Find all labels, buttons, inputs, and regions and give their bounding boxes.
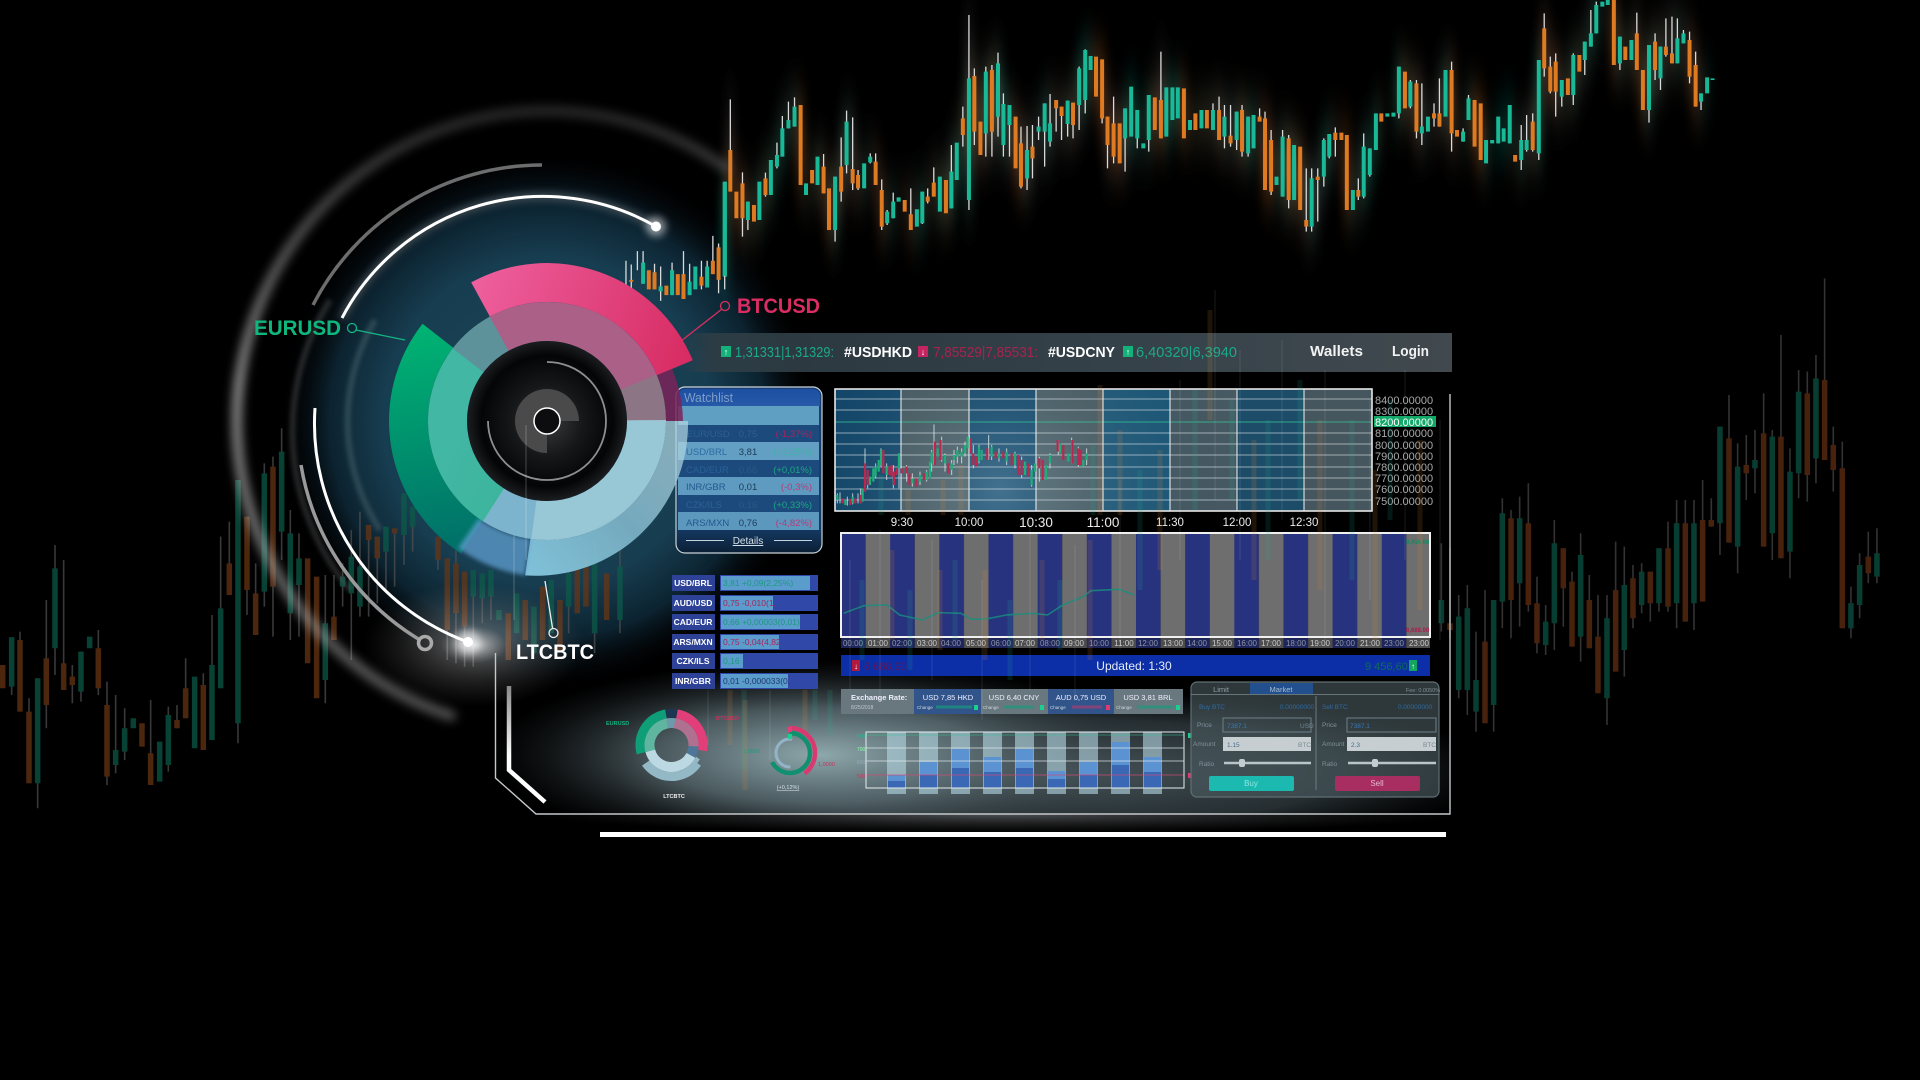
hour axis: 11:00	[1114, 639, 1134, 648]
bar chart markers: 700	[857, 747, 866, 753]
mini ring chart	[606, 701, 739, 800]
sell column: Ratio	[1322, 761, 1338, 768]
main ring chart	[389, 263, 693, 620]
hour axis: 15:00	[1212, 639, 1233, 648]
watchlist rows	[678, 406, 819, 530]
row ARS/MXN	[672, 634, 818, 650]
watchlist rows: CAD/EUR	[686, 465, 729, 476]
buy column: BTC	[1298, 742, 1311, 749]
center circle	[534, 408, 560, 434]
row CAD/EUR: CAD/EUR	[674, 617, 712, 627]
ticker: USDHKD: #USDHKD	[844, 344, 912, 361]
hour axis: 21:00	[1360, 639, 1381, 648]
row USD/BRL	[672, 575, 818, 591]
watchlist rows: 0,16	[739, 500, 757, 511]
translucent candles showing through the dashboard	[708, 290, 1440, 790]
glow below the frame	[608, 814, 1393, 830]
watchlist rows: INR/GBR	[686, 482, 726, 493]
white arc lower with end dot	[314, 408, 480, 654]
time axis: 11:30	[1156, 517, 1184, 529]
mini candles inside price chart	[835, 424, 1087, 506]
gauge markers and labels: 1,0000	[818, 762, 835, 768]
watchlist details link: Details	[733, 536, 763, 547]
watchlist title: Watchlist	[684, 391, 734, 405]
mini ring labels: LTCBTC	[663, 794, 685, 800]
sell button: Sell	[1370, 779, 1384, 788]
hour axis: 13:00	[1163, 639, 1184, 648]
price axis: 8100.00000	[1375, 428, 1433, 440]
hour axis: 18:00	[1286, 639, 1307, 648]
time axis: 11:00	[1087, 515, 1119, 530]
buy column: 1.15	[1227, 742, 1240, 749]
row AUD/USD: 0,75 -0,010(1,	[723, 598, 776, 608]
hour axis: 03:00	[917, 639, 938, 648]
ticker: USDCNY: 6,40320|6,3940	[1136, 344, 1237, 361]
hour axis: 01:00	[868, 639, 889, 648]
watchlist rows: (+0,33%)	[773, 500, 812, 511]
hour axis: 20:00	[1335, 639, 1356, 648]
watchlist rows: 0,01	[739, 482, 757, 493]
sell column: 0.00000000	[1398, 704, 1433, 711]
ticker: USDHKD: ↓	[921, 347, 925, 357]
exchange rate cells: USD 7,85 HKD	[923, 693, 974, 702]
ticker: USDCNY	[1048, 344, 1237, 361]
hour axis: 04:00	[941, 639, 962, 648]
low price with down arrow: 6 688,90	[864, 661, 907, 673]
watchlist rows: 0,76	[739, 518, 757, 529]
low price with down arrow: ↓	[854, 662, 858, 671]
corner elbow accent	[509, 686, 545, 802]
hour axis: 09:00	[1064, 639, 1085, 648]
sell column	[1322, 704, 1436, 768]
bright lens flare at arc end	[364, 583, 584, 707]
mini ring labels: BTCUSD	[716, 716, 739, 722]
time axis: 12:00	[1223, 517, 1251, 529]
exchange rate cells: AUD 0,75 USD	[1056, 693, 1107, 702]
background glow behind the ring	[282, 156, 812, 686]
price axis: 7900.00000	[1375, 451, 1433, 463]
ghost candle crossing the center	[514, 425, 526, 620]
label: LTCBTC	[516, 581, 594, 664]
row INR/GBR	[672, 673, 818, 689]
order tabs	[1213, 683, 1440, 694]
hour axis: 14:00	[1187, 639, 1208, 648]
row AUD/USD	[672, 595, 818, 611]
central grey pie	[515, 389, 579, 453]
row CZK/ILS	[672, 653, 818, 669]
order tabs: Limit	[1213, 685, 1230, 694]
watchlist rows: 3,81	[739, 447, 757, 458]
candlestick chart glow: blurred echo of the main chart	[725, 0, 1713, 277]
price axis: 8200.00000	[1375, 417, 1433, 429]
infographic canvas	[0, 0, 1880, 837]
hour axis: 17:00	[1261, 639, 1282, 648]
hour axis: 05:00	[966, 639, 987, 648]
hour axis: 19:00	[1310, 639, 1331, 648]
high price with up arrow: 9 456,60	[1365, 661, 1408, 673]
sell column: 7387.1	[1350, 723, 1370, 730]
exchange rate strip: Change	[1050, 705, 1066, 710]
grey arc upper	[313, 165, 542, 305]
exchange rate title: Exchange Rate:	[851, 693, 907, 702]
main candlestick chart: small run beside BTCUSD	[626, 182, 725, 301]
stripes chart end labels: 6,688.90	[1406, 628, 1430, 634]
header ticker bar	[680, 333, 1452, 372]
hour axis: 02:00	[892, 639, 913, 648]
updated status bar	[841, 655, 1430, 676]
label: EURUSD	[254, 316, 405, 340]
gauge markers and labels: 1,0000	[743, 749, 760, 755]
hour axis: 00:00	[843, 639, 864, 648]
bar chart markers: 800	[857, 734, 866, 740]
panel: buy and sell order form	[1191, 682, 1440, 797]
hour axis: 07:00	[1015, 639, 1036, 648]
hour axis: 10:00	[1089, 639, 1110, 648]
gauge markers and labels	[743, 727, 835, 791]
sell column: Amount	[1322, 741, 1345, 748]
ticker: green pair: ↑	[724, 347, 728, 357]
watchlist rows: 0,66	[739, 465, 757, 476]
label: BTCUSD: BTCUSD	[737, 294, 820, 318]
ticker: USDCNY: #USDCNY	[1048, 344, 1115, 361]
ticker: green pair: 1,31331|1,31329:	[735, 344, 834, 361]
faint inner halo arcs	[292, 300, 380, 590]
grey arc lower with ring end	[301, 465, 432, 650]
time axis: 9:30	[891, 517, 913, 529]
dim candlestick chart: lower right	[1441, 278, 1877, 732]
row ARS/MXN: ARS/MXN	[673, 637, 713, 647]
row USD/BRL: 3,81 +0,09(2,25%)	[723, 578, 793, 588]
exchange rate cells	[923, 693, 1173, 702]
hour axis: 23:00	[1384, 639, 1405, 648]
mini ring labels: EURUSD	[606, 721, 629, 727]
price axis: 8000.00000	[1375, 440, 1433, 452]
exchange rate title: 8/25/2018	[851, 705, 873, 711]
row ARS/MXN: 0,75 -0,04(4,82	[723, 637, 781, 647]
price chart	[835, 389, 1436, 530]
hour axis: 08:00	[1040, 639, 1061, 648]
exchange rate strip: Change	[1116, 705, 1132, 710]
panel: watchlist	[676, 387, 822, 553]
nav: login: Login	[1392, 344, 1429, 360]
exchange rate cells: USD 3,81 BRL	[1123, 693, 1173, 702]
main candlestick chart: upper right	[725, 0, 1713, 277]
watchlist rows: (-1,37%)	[776, 429, 812, 440]
nav: wallets: Wallets	[1310, 344, 1363, 360]
buy column: Amount	[1193, 741, 1216, 748]
row INR/GBR: INR/GBR	[675, 676, 711, 686]
exchange rate strip: Change	[917, 705, 933, 710]
buy button	[1209, 776, 1294, 791]
buy button: Buy	[1244, 779, 1258, 788]
price axis: 7600.00000	[1375, 484, 1433, 496]
sell button	[1335, 776, 1420, 791]
exchange rate strip: Change	[983, 705, 999, 710]
outer sector: BTCUSD pink	[471, 263, 693, 375]
buy column: USD	[1300, 723, 1314, 730]
row INR/GBR: 0,01 -0,000033(0,	[723, 676, 790, 686]
order tabs: Market	[1270, 685, 1293, 694]
sell column: BTC	[1423, 742, 1436, 749]
thin inner arc	[488, 362, 606, 480]
stripes chart end labels	[1406, 540, 1430, 634]
row CZK/ILS: 0,16	[723, 656, 740, 666]
hour axis: 06:00	[991, 639, 1012, 648]
buy column: Price	[1197, 722, 1212, 729]
time axis	[891, 515, 1318, 530]
outer blurred arc	[237, 111, 725, 716]
gauge ring chart	[743, 727, 835, 791]
outer sector: dim blue fade	[458, 518, 530, 575]
buy column: 7387.1	[1227, 723, 1247, 730]
panel: currency pair table	[672, 575, 818, 689]
line on stripes chart	[844, 589, 1134, 620]
label: LTCBTC: LTCBTC	[516, 640, 594, 664]
row USD/BRL: USD/BRL	[674, 578, 712, 588]
buy column: Ratio	[1199, 761, 1215, 768]
watchlist rows: (-4,82%)	[776, 518, 812, 529]
bar chart markers: 600	[857, 760, 866, 766]
price axis: 8400.00000	[1375, 395, 1433, 407]
time axis: 12:30	[1290, 517, 1318, 529]
watchlist rows: EUR/USD	[687, 429, 730, 440]
bottom panel glow	[516, 668, 1449, 814]
exchange rate title	[851, 693, 907, 711]
thick white base bar	[600, 832, 1446, 837]
updated time: Updated: 1:30	[1096, 659, 1172, 673]
exchange rate cells: USD 6,40 CNY	[989, 693, 1039, 702]
outer sector: EURUSD green	[389, 324, 482, 554]
price axis: 7800.00000	[1375, 462, 1433, 474]
sell column: 2.3	[1351, 742, 1360, 749]
bar chart markers: 500	[857, 774, 866, 780]
mini ring labels	[606, 716, 739, 800]
sell column: Price	[1322, 722, 1337, 729]
watchlist rows: (+0,01%)	[773, 465, 812, 476]
hour axis: 16:00	[1237, 639, 1258, 648]
buy column	[1193, 704, 1315, 768]
outer sector: dark magenta wedge	[657, 369, 683, 421]
sell column: Sell BTC	[1322, 704, 1348, 711]
volume bar chart	[857, 732, 1192, 794]
dashboard frame	[496, 394, 1450, 814]
bar chart markers	[857, 733, 1192, 780]
row CAD/EUR: 0,66 +0,00003(0,01)	[723, 617, 800, 627]
watchlist rows: USD/BRL	[686, 447, 727, 458]
mid sectors	[407, 281, 687, 561]
time axis: 10:00	[955, 517, 983, 529]
volume stripes chart	[841, 533, 1430, 648]
price axis: 7700.00000	[1375, 473, 1433, 485]
order tabs: Fee: 0.0050%	[1406, 688, 1440, 694]
stripes chart end labels: 9,456.60	[1406, 540, 1430, 546]
watchlist details link	[686, 536, 812, 547]
row AUD/USD: AUD/USD	[674, 598, 712, 608]
white arc upper with end dot	[342, 196, 666, 318]
hour axis	[841, 638, 1430, 648]
central dark disc	[467, 341, 627, 501]
watchlist rows: ARS/MXN	[686, 518, 729, 529]
row CAD/EUR	[672, 614, 818, 630]
hour axis: 12:00	[1138, 639, 1159, 648]
buy column: Buy BTC	[1199, 704, 1225, 711]
watchlist rows: 0,75	[739, 429, 757, 440]
ticker: USDHKD: 7,85529|7,85531:	[933, 344, 1038, 361]
price axis: 8300.00000	[1375, 406, 1433, 418]
price axis: 7500.00000	[1375, 496, 1433, 508]
exchange rate strip	[841, 689, 1183, 714]
watchlist rows: CZK/ILS	[686, 500, 722, 511]
row CZK/ILS: CZK/ILS	[676, 656, 710, 666]
high price with up arrow: ↑	[1411, 662, 1415, 671]
label: EURUSD: EURUSD	[254, 316, 341, 340]
buy column: 0.00000000	[1280, 704, 1315, 711]
gauge markers and labels: (+0,12%)	[777, 785, 799, 791]
hour axis: 23:00	[1409, 639, 1430, 648]
time axis: 10:30	[1019, 515, 1053, 530]
outer sector: LTCBTC light blue	[525, 421, 688, 576]
watchlist rows: (-0,3%)	[781, 482, 812, 493]
dim candlestick chart: lower left	[3, 428, 620, 808]
price axis	[1374, 395, 1436, 508]
ticker: USDHKD	[844, 344, 1038, 361]
watchlist rows: (+2,25%)	[773, 447, 812, 458]
ticker: USDCNY: ↑	[1126, 347, 1130, 357]
label: BTCUSD	[681, 294, 820, 341]
